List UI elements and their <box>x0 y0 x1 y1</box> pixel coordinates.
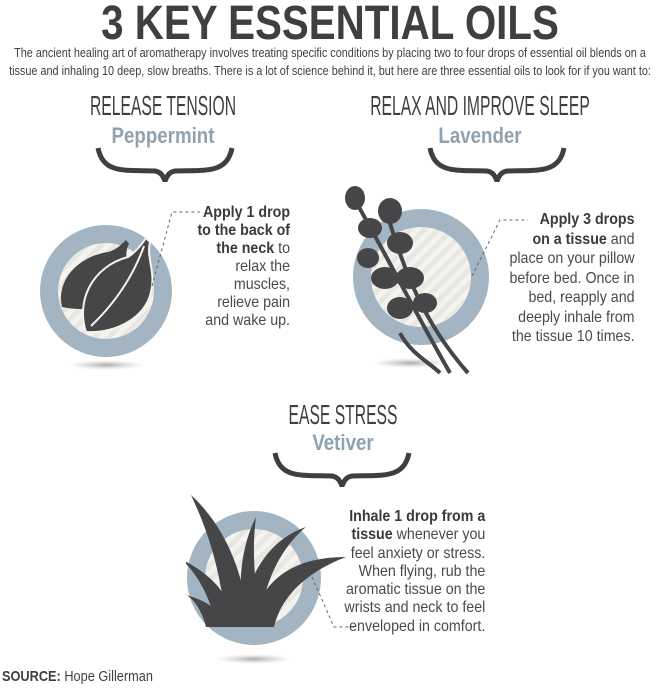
panel: lavender <box>345 90 635 374</box>
text: vetiver instructions: aromatic tissue on the <box>346 581 485 598</box>
text: vetiver instructions <box>344 508 486 635</box>
text: peppermint instructions: muscles, <box>234 276 290 293</box>
name: lavender: Lavender <box>438 123 522 148</box>
text: lavender instructions: before bed. Once in <box>510 270 635 286</box>
dashed leader <box>312 576 354 628</box>
text: vetiver instructions: Inhale 1 drop from a <box>349 508 485 525</box>
text: lavender instructions: deeply inhale from <box>519 308 635 326</box>
heading: relax and improve sleep: RELAX AND IMPROVE SLEEP <box>370 90 590 121</box>
dashed leader <box>472 220 528 276</box>
text: lavender instructions <box>510 211 635 345</box>
icon: vetiver grass in circle <box>186 495 346 663</box>
text: vetiver instructions: wrists and neck to feel <box>344 599 485 616</box>
brace <box>428 148 566 182</box>
heading: ease stress: EASE STRESS <box>289 399 397 430</box>
intro text: The ancient healing art of aromatherapy involves treating specific conditions by placing two to four drops of essential oil blends on a <box>14 45 646 60</box>
icon: peppermint leaves in circle <box>40 225 172 369</box>
text: vetiver instructions: tissue whenever you <box>351 526 485 543</box>
text: peppermint instructions: relax the <box>235 258 290 275</box>
text: vetiver instructions: feel anxiety or stress. <box>350 545 485 562</box>
text: peppermint instructions: to the back of <box>197 222 290 239</box>
text: lavender instructions: bed, reapply and <box>529 289 635 306</box>
text: peppermint instructions: the neck to <box>216 240 290 257</box>
brace <box>272 452 412 487</box>
text: vetiver instructions: When flying, rub the <box>358 563 485 580</box>
icon: lavender in circle <box>345 186 489 374</box>
text: lavender instructions: the tissue 10 times. <box>512 328 635 345</box>
name: vetiver: Vetiver <box>312 430 374 455</box>
text: vetiver instructions: enveloped in comfort. <box>349 618 485 635</box>
heading: release tension: RELEASE TENSION <box>90 90 236 121</box>
source: SOURCE: Hope Gillerman <box>2 668 153 685</box>
dashed leader <box>152 212 200 286</box>
text: lavender instructions: place on your pillow <box>510 250 635 267</box>
name: peppermint: Peppermint <box>112 123 214 148</box>
text: peppermint instructions: Apply 1 drop <box>203 204 290 221</box>
text: lavender instructions: Apply 3 drops <box>540 211 635 228</box>
panel: peppermint <box>40 90 290 369</box>
intro text <box>9 45 651 78</box>
text: lavender instructions: on a tissue and <box>533 230 635 248</box>
brace <box>96 148 234 182</box>
intro text: tissue and inhaling 10 deep, slow breaths. There is a lot of science behind it, but here are three essential oils to look for if you want to: <box>9 63 651 78</box>
panel: vetiver <box>186 399 486 663</box>
text: peppermint instructions: and wake up. <box>205 312 290 329</box>
text: peppermint instructions: relieve pain <box>217 294 290 311</box>
text: peppermint instructions <box>197 204 290 329</box>
